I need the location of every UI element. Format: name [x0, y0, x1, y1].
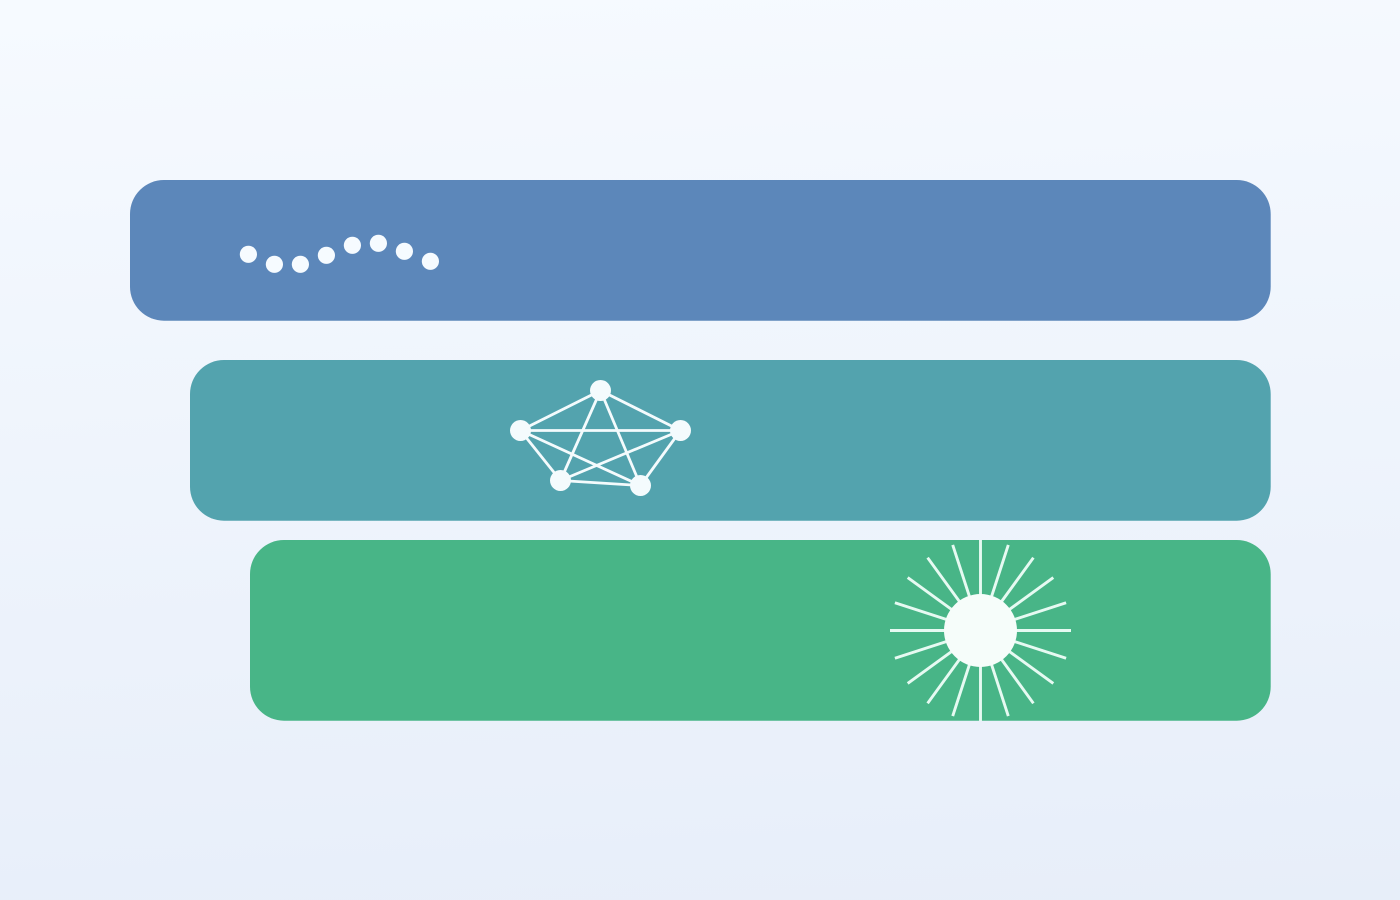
icon: sunburst [890, 540, 1071, 721]
panel: teal bar [190, 360, 1271, 521]
icon: fully connected network [510, 380, 691, 496]
icon: wavy dotted line [240, 235, 439, 273]
panel: blue bar [130, 180, 1271, 321]
panel: green bar [250, 540, 1271, 721]
